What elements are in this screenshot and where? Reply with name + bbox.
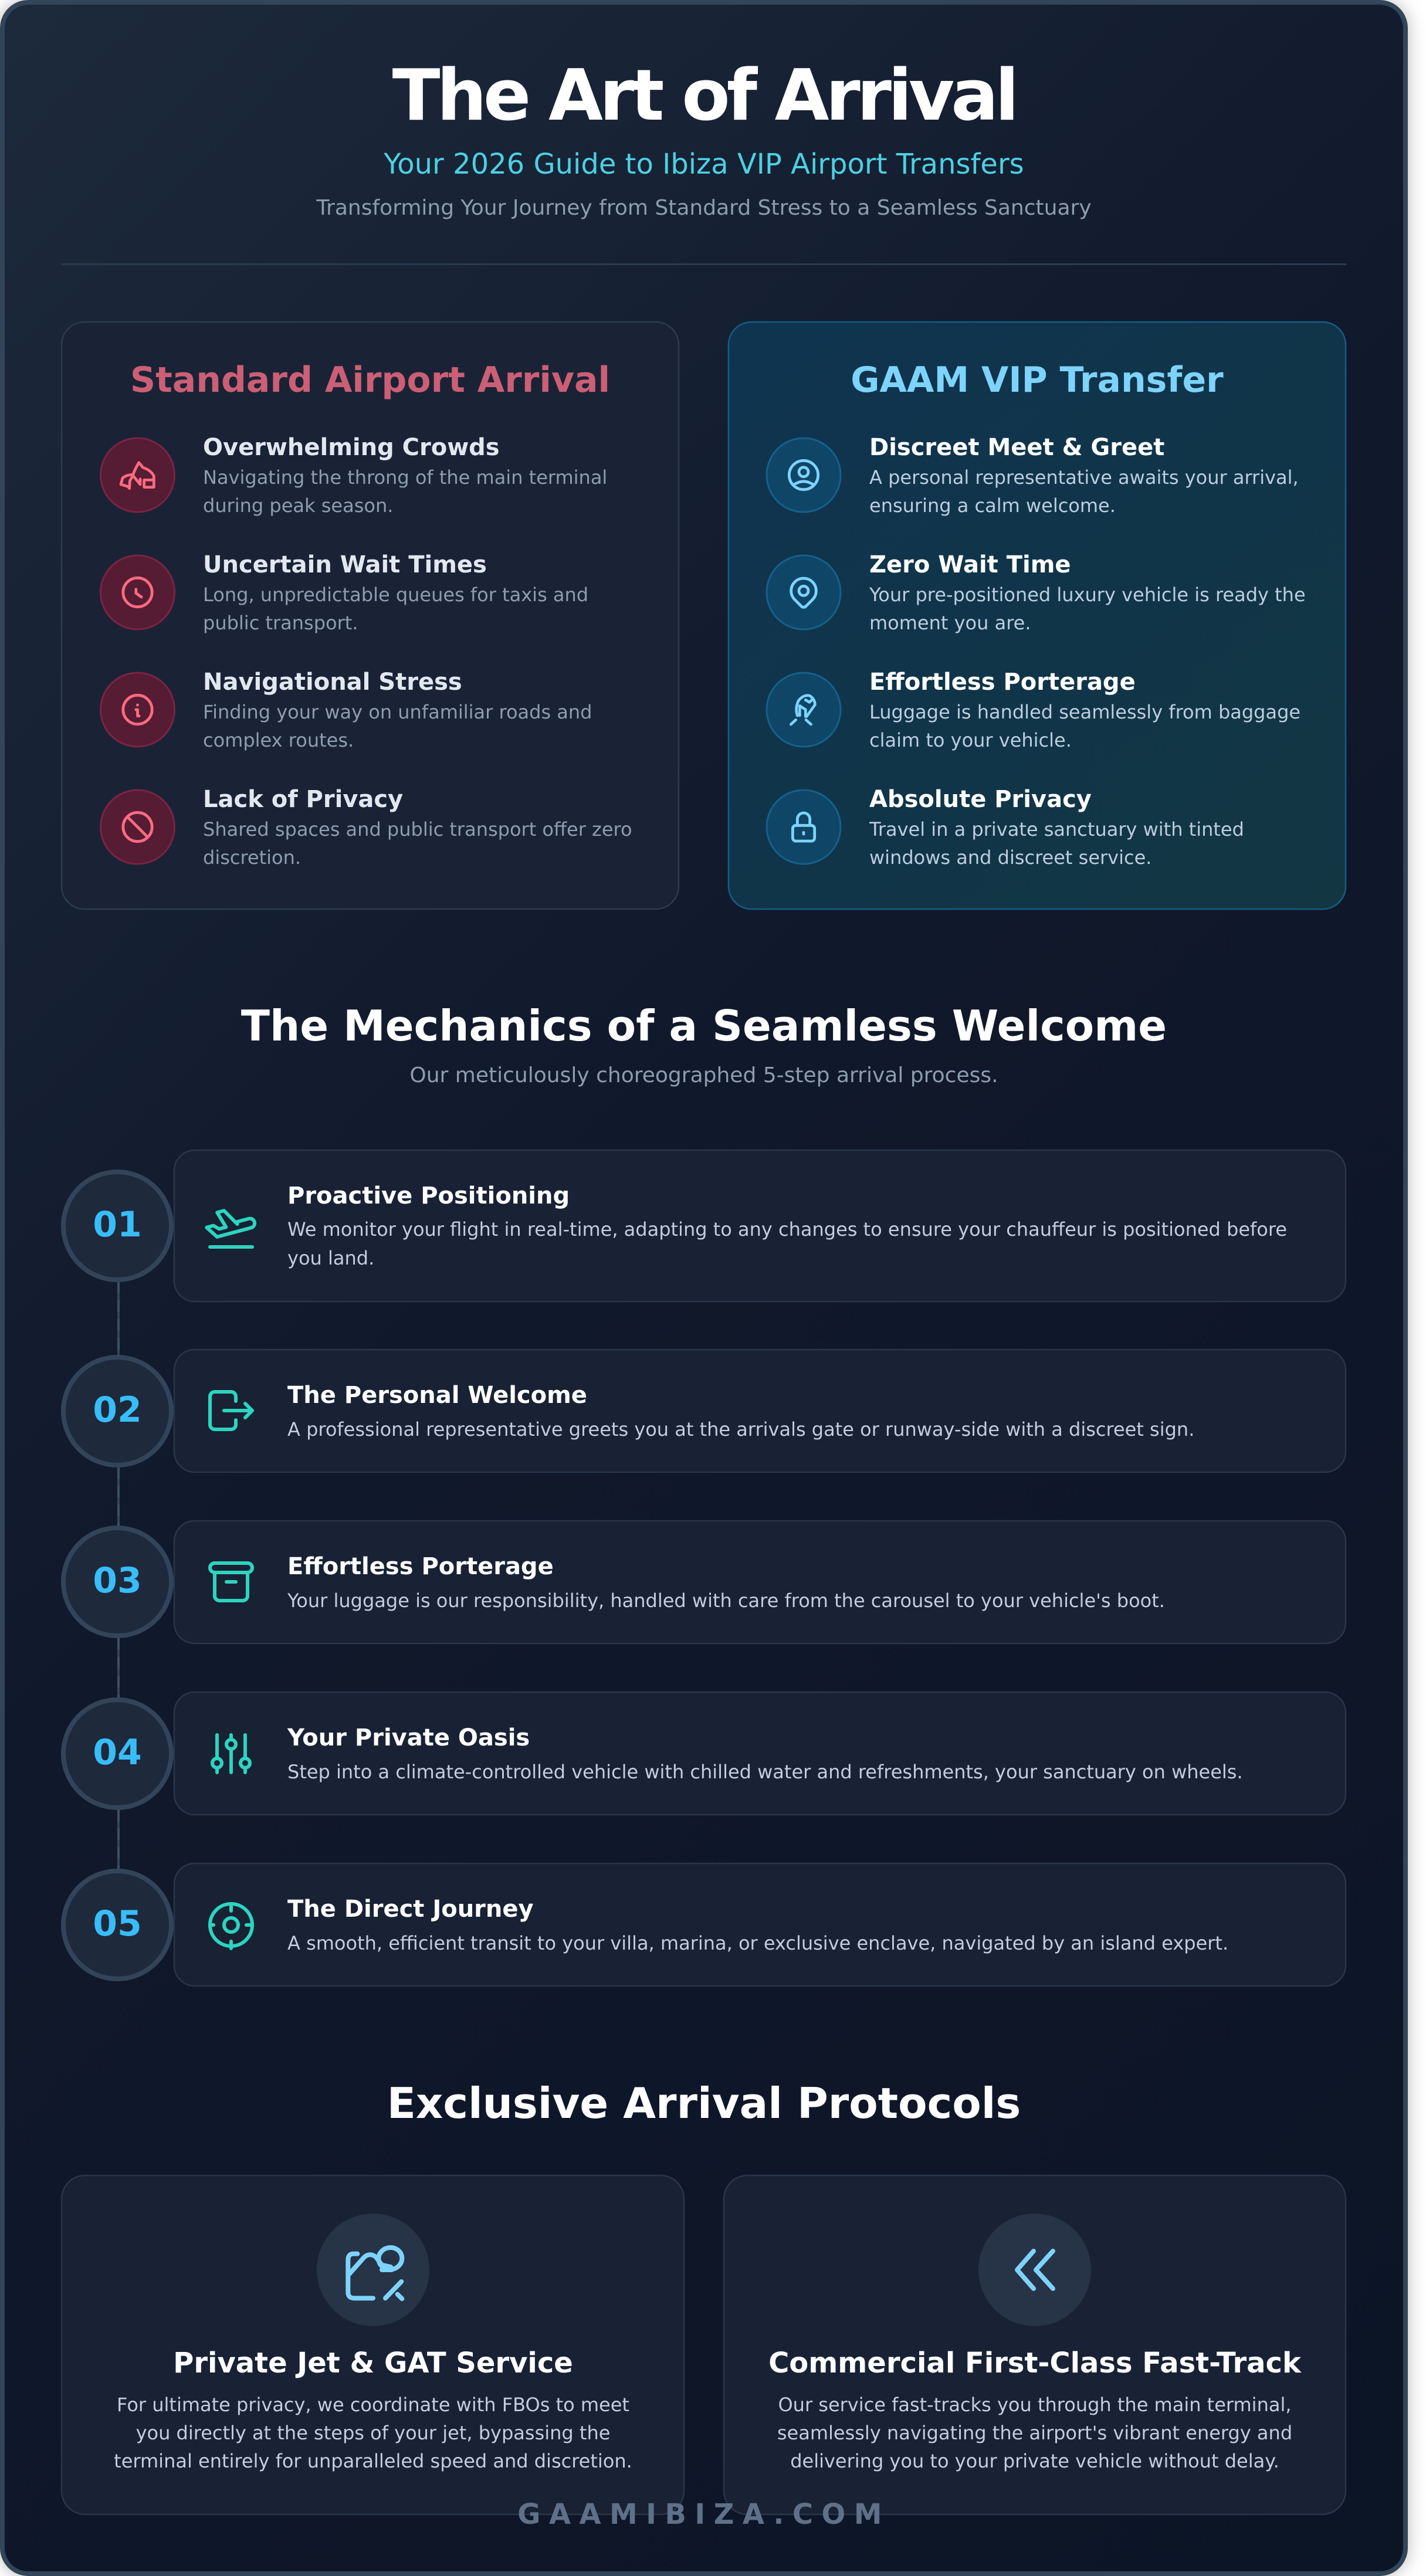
panel: commercial first-class fast-track: delivering you to your private vehicle without delay. [790,2450,1279,2472]
icon: plane departure [206,1211,255,1247]
step card 03 [174,1521,1346,1643]
item: discreet meet and greet: A personal representative awaits your arrival, [869,466,1299,489]
step 05: The Direct Journey [287,1896,534,1923]
timeline connectors [117,1282,120,1869]
item: absolute privacy: windows and discreet service. [869,846,1151,869]
icon: private jet [348,2246,404,2299]
footer brand: GAAMIBIZA.COM [517,2498,890,2531]
icon: target [210,1904,252,1948]
icon: lock [792,813,815,841]
panel: standard airport arrival [62,322,679,909]
step 01: Proactive Positioning [287,1182,570,1209]
item: absolute privacy: Absolute Privacy [869,786,1092,813]
item: uncertain wait times: Long, unpredictable queues for taxis and [203,584,588,606]
section subheading: Our meticulously choreographed 5-step arrival process. [409,1063,998,1087]
item: effortless porterage: claim to your vehicle. [869,729,1072,751]
panel: private jet and GAT service [62,2175,684,2514]
panel: commercial first-class fast-track: seamlessly navigating the airport's vibrant energy and [777,2422,1292,2444]
step 03: 03 [93,1560,142,1601]
item: zero wait time: moment you are. [869,612,1031,634]
step 01: you land. [287,1247,374,1269]
item: overwhelming crowds [101,434,607,517]
item: absolute privacy: Travel in a private sanctuary with tinted [869,818,1244,840]
section heading: protocols: Exclusive Arrival Protocols [387,2079,1021,2128]
step 03: Your luggage is our responsibility, handled with care from the carousel to your vehicle's boot. [287,1589,1165,1612]
step card 01 [174,1150,1346,1301]
item: navigational stress [101,669,592,751]
icon: exit door [210,1392,252,1429]
panel: private jet and GAT service: Private Jet & GAT Service [173,2347,573,2380]
panel: commercial first-class fast-track [724,2175,1346,2514]
item: overwhelming crowds: Overwhelming Crowds [203,434,500,461]
icon: sliders [212,1735,250,1772]
item: lack of privacy: Lack of Privacy [203,786,403,813]
item: absolute privacy [767,786,1244,869]
icon: crowds [121,463,154,489]
item: navigational stress: complex routes. [203,729,354,751]
panel: private jet and GAT service: terminal entirely for unparalleled speed and discretion. [114,2450,632,2472]
item: overwhelming crowds: during peak season. [203,494,393,517]
item: lack of privacy [101,786,632,869]
section heading: mechanics [241,1001,1167,1087]
item: effortless porterage [767,669,1300,751]
step 02 [63,1350,1346,1472]
icon: map pin [791,578,816,607]
heading: standard arrival: Standard Airport Arrival [130,360,610,401]
step 04: 04 [93,1732,142,1773]
item: zero wait time [767,551,1306,634]
icon: double chevron [1017,2251,1053,2289]
step 01 [63,1150,1346,1301]
step card 02 [174,1350,1346,1472]
icon: luggage [791,696,815,724]
subtitle: Your 2026 Guide to Ibiza VIP Airport Transfers [383,148,1024,181]
header [316,55,1092,220]
item: uncertain wait times: Uncertain Wait Times [203,551,487,578]
item: uncertain wait times: public transport. [203,612,358,634]
step 01: We monitor your flight in real-time, adapting to any changes to ensure your chauffeur is positioned before [287,1218,1287,1240]
item: zero wait time: Your pre-positioned luxury vehicle is ready the [869,584,1306,606]
step 01: 01 [93,1204,142,1245]
step 05 [63,1863,1346,1986]
item: discreet meet and greet [767,434,1299,517]
panel: private jet and GAT service: you directly at the steps of your jet, bypassing the [136,2422,610,2444]
step 03 [63,1521,1346,1643]
step 05: A smooth, efficient transit to your villa, marina, or exclusive enclave, navigated by an island expert. [287,1932,1228,1954]
item: zero wait time: Zero Wait Time [869,551,1071,578]
icon: archive box [210,1563,252,1601]
item: uncertain wait times [101,551,588,634]
section heading: mechanics: The Mechanics of a Seamless Welcome [241,1001,1167,1050]
tagline: Transforming Your Journey from Standard Stress to a Seamless Sanctuary [316,196,1092,220]
item: navigational stress: Finding your way on unfamiliar roads and [203,701,592,723]
panel: GAAM VIP transfer [729,322,1346,909]
step 05: 05 [93,1903,142,1944]
icon: ban [123,812,152,842]
item: discreet meet and greet: ensuring a calm welcome. [869,494,1116,517]
item: lack of privacy: discretion. [203,846,301,869]
step 02: The Personal Welcome [287,1382,587,1409]
icon: user circle [789,460,818,490]
step 04: Step into a climate-controlled vehicle with chilled water and refreshments, your sanctuary on wheels. [287,1761,1243,1783]
item: discreet meet and greet: Discreet Meet & Greet [869,434,1164,461]
icon: info [123,695,152,724]
icon: clock [123,578,152,607]
item: effortless porterage: Luggage is handled seamlessly from baggage [869,701,1300,723]
step card 04 [174,1692,1346,1815]
panel: commercial first-class fast-track: Our service fast-tracks you through the main terminal, [778,2394,1292,2416]
step 04: Your Private Oasis [287,1724,530,1751]
step 02: A professional representative greets you at the arrivals gate or runway-side with a discreet sign. [287,1418,1194,1440]
panel: private jet and GAT service: For ultimate privacy, we coordinate with FBOs to meet [117,2394,629,2416]
step 04 [63,1692,1346,1815]
item: navigational stress: Navigational Stress [203,669,462,696]
item: effortless porterage: Effortless Porterage [869,669,1136,696]
item: overwhelming crowds: Navigating the throng of the main terminal [203,466,607,489]
heading: GAAM VIP transfer: GAAM VIP Transfer [851,360,1224,401]
step 02: 02 [93,1389,142,1431]
panel: commercial first-class fast-track: Commercial First-Class Fast-Track [768,2347,1302,2380]
item: lack of privacy: Shared spaces and public transport offer zero [203,818,632,840]
step 03: Effortless Porterage [287,1553,554,1580]
title: The Art of Arrival [392,55,1015,137]
step card 05 [174,1863,1346,1986]
